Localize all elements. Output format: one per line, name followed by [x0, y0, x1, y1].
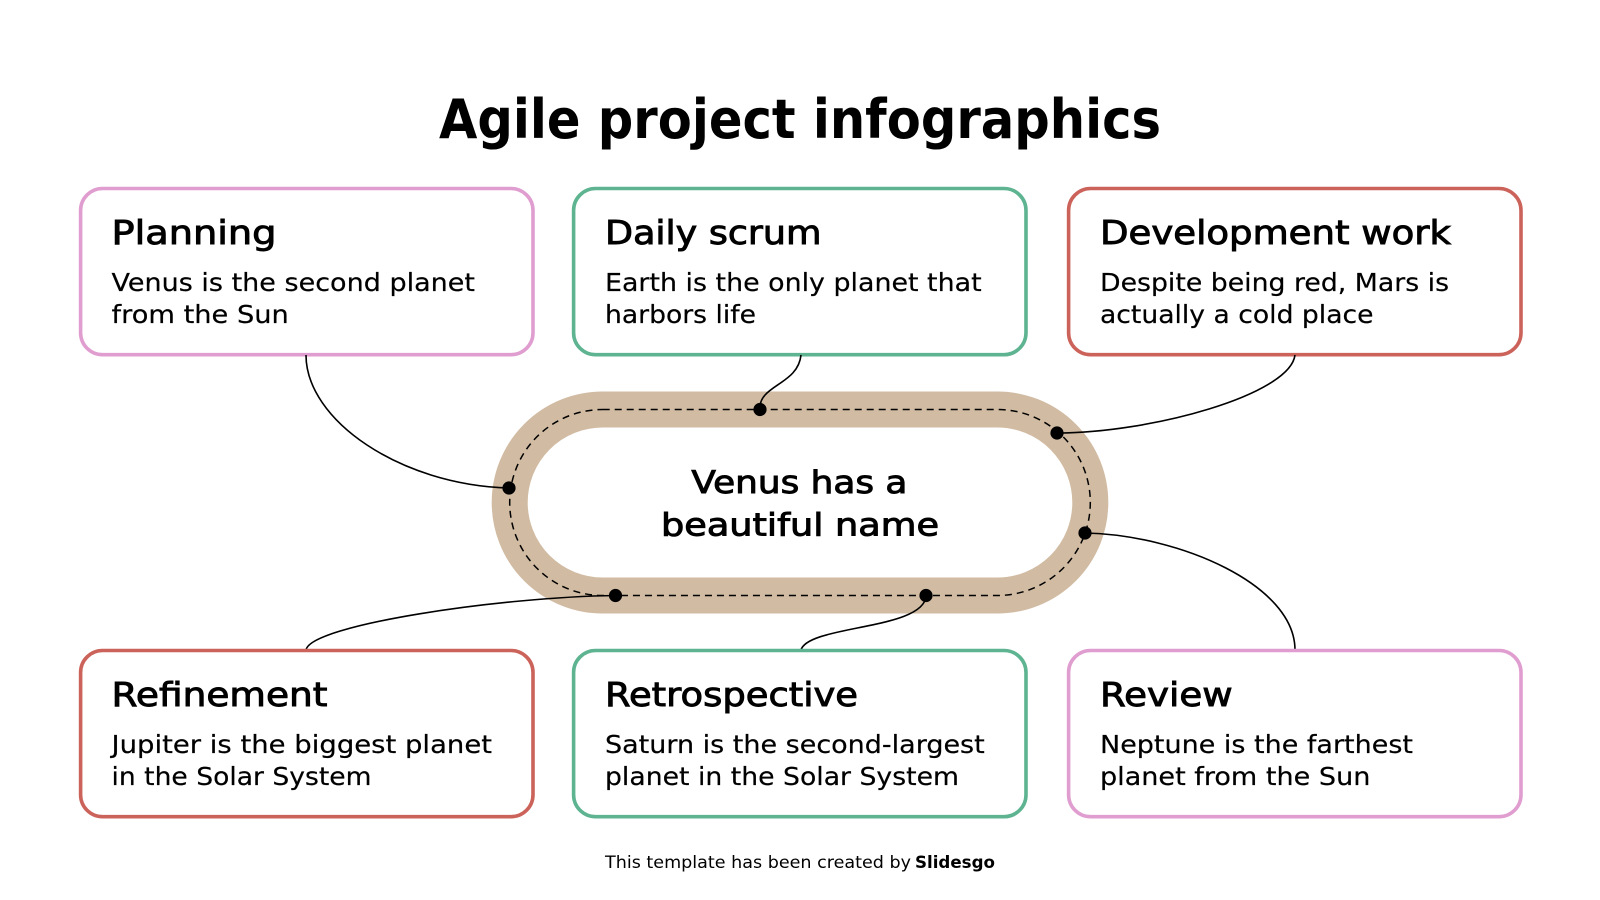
panel: daily scrum: Daily scrum	[605, 213, 822, 252]
central label	[661, 465, 939, 544]
connector: refinement	[306, 589, 622, 650]
panel: retrospective: Retrospective	[605, 675, 858, 714]
central pill	[510, 410, 1090, 596]
connector: daily scrum	[753, 355, 801, 416]
panel: retrospective: planet in the Solar System	[605, 762, 959, 791]
panel: planning: Venus is the second planet	[112, 268, 475, 297]
panel: refinement	[81, 650, 533, 817]
connector: development work	[1050, 355, 1295, 440]
panel: retrospective: Saturn is the second-largest	[605, 730, 985, 759]
panel: planning	[81, 188, 533, 355]
title: Agile project infographics	[439, 88, 1161, 151]
panel: development work: Development work	[1100, 213, 1452, 252]
panel: planning: from the Sun	[112, 300, 289, 329]
panel: retrospective	[574, 650, 1026, 817]
panel: daily scrum: harbors life	[605, 300, 756, 329]
panel: refinement: in the Solar System	[112, 762, 372, 791]
panel: refinement: Jupiter is the biggest planet	[109, 730, 492, 759]
panel: development work	[1069, 188, 1521, 355]
panel: review: Review	[1100, 675, 1233, 714]
panel: refinement: Refinement	[112, 675, 328, 714]
panel: daily scrum	[574, 188, 1026, 355]
central label: Venus has a	[691, 465, 907, 501]
central label: beautiful name	[661, 508, 939, 544]
panel: review: Neptune is the farthest	[1100, 730, 1413, 759]
connector: retrospective	[801, 589, 933, 650]
panel: review	[1069, 650, 1521, 817]
footer credit: This template has been created by	[604, 853, 911, 873]
panel: planning: Planning	[112, 213, 276, 252]
connector: review	[1078, 526, 1295, 650]
panel: review: planet from the Sun	[1100, 762, 1370, 791]
footer credit: Slidesgo	[915, 853, 995, 873]
connector: planning	[306, 355, 516, 495]
panel: development work: Despite being red, Mars is	[1100, 268, 1449, 297]
panel: daily scrum: Earth is the only planet that	[605, 268, 982, 297]
panel: development work: actually a cold place	[1100, 300, 1374, 329]
